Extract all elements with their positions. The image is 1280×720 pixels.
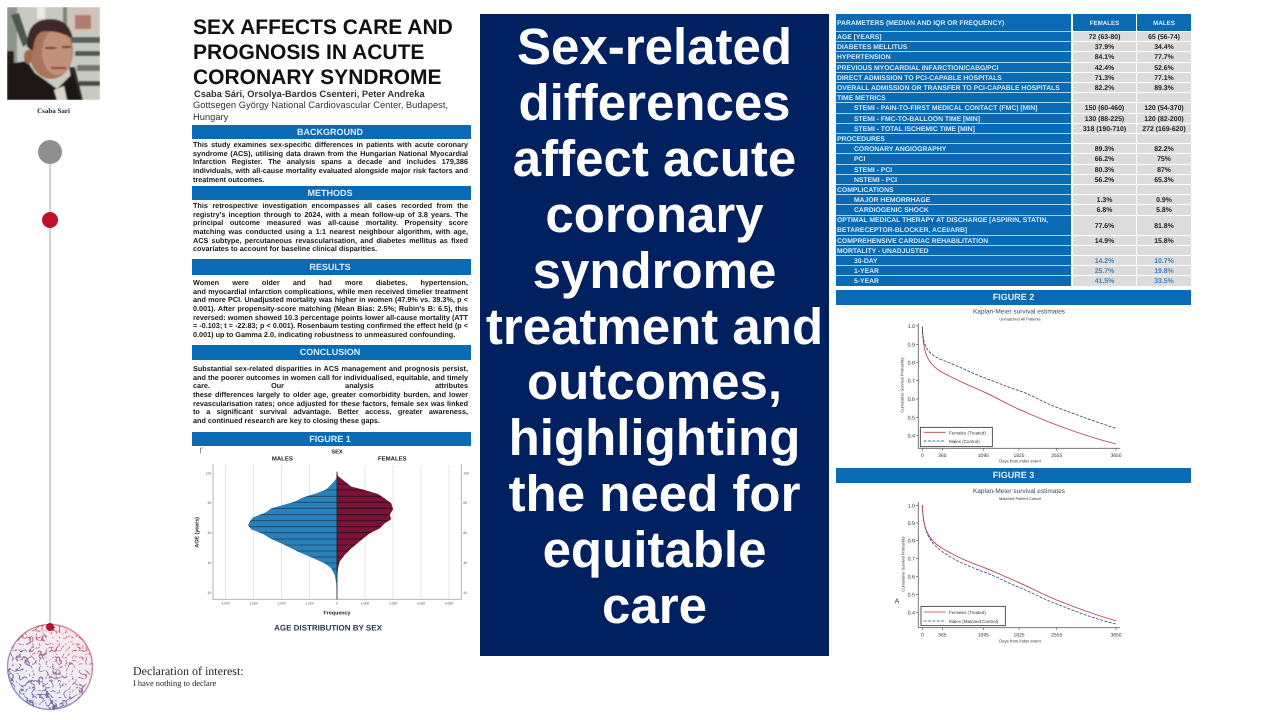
- legend matched: Females (Treated): [949, 610, 986, 615]
- heading: conclusion: CONCLUSION: [300, 347, 360, 357]
- text: results: reversed: women showed 10.3 percentage points lower all-cause mortality (ATT: [193, 313, 468, 322]
- text: conclusion: to a significant survival advantage. Better access, greater awareness,: [193, 407, 468, 416]
- row: overall admission: OVERALL ADMISSION OR TRANSFER TO PCI-CAPABLE HOSPITALS: [837, 85, 1060, 92]
- chart: age distribution by sex: 100: [206, 472, 211, 475]
- heading: figure 1: FIGURE 1: [309, 434, 351, 444]
- row: cardiac rehabilitation: 14.9%: [1095, 238, 1114, 245]
- text: background: treatment outcomes.: [193, 175, 264, 184]
- chart: age distribution by sex: MALES: [272, 455, 293, 462]
- chart: Kaplan-Meier unmatched: Days from index event: [999, 459, 1041, 464]
- text: results: = -0.103; t = -22.83; p < 0.001). Rosenbaum testing confirmed the effect held (p <: [193, 321, 468, 330]
- curve: males: [922, 327, 1116, 428]
- chart: Kaplan-Meier unmatched: 1825: [1013, 453, 1025, 458]
- row: hypertension: 77.7%: [1154, 54, 1174, 61]
- row: cardiac rehabilitation: 15.8%: [1154, 238, 1174, 245]
- text: background: Infarction Register. The analysis spans a decade and includes 179,386: [193, 157, 468, 166]
- text: results: and myocardial infarction complications, while men received timelier treatment: [193, 287, 468, 296]
- central message panel: Sex-related: [517, 18, 792, 75]
- row: major hemorrhage: MAJOR HEMORRHAGE: [854, 197, 930, 204]
- affiliation: Gottsegen György National Cardiovascular Center, Budapest,: [193, 100, 448, 110]
- row: overall admission: [836, 83, 1191, 92]
- title: CORONARY SYNDROME: [193, 66, 442, 89]
- text: conclusion: and continued research are key to closing these gaps.: [193, 416, 380, 425]
- chart: Kaplan-Meier matched: Matched Patient Cohort: [999, 496, 1041, 501]
- chart: age distribution by sex: 1,000: [305, 602, 314, 606]
- row: PCI: [836, 154, 1191, 164]
- presenter name: Csaba Sari: [37, 107, 70, 115]
- row: FMC to balloon: 130 (88-225): [1085, 116, 1124, 123]
- row: PCI: PCI: [854, 156, 865, 163]
- row: overall admission: 89.3%: [1154, 85, 1174, 92]
- row: 5-year mortality: 5-YEAR: [854, 278, 879, 285]
- table: patient characteristics: [836, 14, 1191, 286]
- row: major hemorrhage: 0.9%: [1156, 197, 1172, 204]
- chart: Kaplan-Meier matched: 0.9: [908, 521, 915, 526]
- chart: age distribution by sex: 60: [463, 531, 467, 535]
- title: [193, 16, 453, 89]
- chart: Kaplan-Meier matched: 0.8: [908, 538, 915, 544]
- chart: Kaplan-Meier matched: 0: [921, 632, 924, 638]
- chart: age distribution by sex: 3,000: [417, 602, 425, 606]
- chart: Kaplan-Meier unmatched: 0.5: [908, 415, 915, 421]
- chart: age distribution by sex: 80: [463, 501, 467, 505]
- row: NSTEMI PCI: 56.2%: [1095, 177, 1114, 184]
- chart: Kaplan-Meier matched: 0.4: [908, 610, 915, 616]
- row: 30-day mortality: [836, 256, 1191, 265]
- central message panel: affect acute: [513, 130, 796, 187]
- text: conclusion: Substantial sex-related disparities in ACS management and prognosis persist,: [193, 364, 468, 373]
- male bars: [245, 470, 337, 598]
- row: procedures section: [836, 134, 1191, 143]
- row: diabetes: [836, 42, 1191, 51]
- chart: Kaplan-Meier unmatched: Kaplan-Meier survival estimates: [973, 308, 1065, 315]
- legend matched: Males (Matched Control): [949, 619, 998, 624]
- row: STEMI PCI: STEMI - PCI: [854, 167, 892, 174]
- row: cardiac rehabilitation: COMPREHENSIVE CARDIAC REHABILITATION: [837, 238, 988, 245]
- text: results: and more PCI. Unadjusted mortality was higher in women (47.9% vs. 39.3%, p <: [193, 295, 468, 304]
- row: NSTEMI PCI: 65.3%: [1154, 177, 1174, 184]
- row: coronary angiography: 89.3%: [1095, 146, 1114, 153]
- row: complications section: [836, 185, 1191, 194]
- chart: Kaplan-Meier unmatched: 0.8: [908, 360, 915, 366]
- declaration of interest: I have nothing to declare: [133, 679, 216, 688]
- row: 5-year mortality: [836, 276, 1191, 286]
- row: 30-day mortality: 10.7%: [1154, 258, 1174, 265]
- row: direct admission: DIRECT ADMISSION TO PCI-CAPABLE HOSPITALS: [837, 75, 1002, 82]
- chart: Kaplan-Meier matched: 1825: [1013, 632, 1025, 638]
- row: procedures section: PROCEDURES: [837, 136, 885, 143]
- text: methods: matching was conducted using a 1:1 nearest neighbour algorithm, with age,: [193, 227, 468, 236]
- curve: males matched: [922, 505, 1116, 624]
- row: previous MI: PREVIOUS MYOCARDIAL INFARCTION/CABG/PCI: [837, 65, 998, 72]
- row: time metrics section: TIME METRICS: [837, 95, 886, 102]
- chart: Kaplan-Meier unmatched: 0.6: [908, 397, 915, 402]
- row: pain to FMC: [836, 103, 1191, 113]
- central message panel: equitable: [543, 521, 766, 578]
- chart: Kaplan-Meier unmatched: Unmatched All Patients: [999, 317, 1041, 322]
- row: cardiogenic shock: [836, 205, 1191, 215]
- chart: Kaplan-Meier matched: 1095: [978, 632, 989, 638]
- chart: Kaplan-Meier matched: 0.7: [908, 556, 915, 562]
- row: 1-year mortality: 19.8%: [1154, 268, 1174, 275]
- row: 5-year mortality: 41.5%: [1095, 278, 1114, 285]
- row: coronary angiography: [836, 144, 1191, 153]
- row: cardiogenic shock: CARDIOGENIC SHOCK: [854, 207, 929, 214]
- row: diabetes: 37.9%: [1095, 44, 1114, 51]
- row: age: [836, 32, 1191, 41]
- chart: Kaplan-Meier unmatched: 2555: [1051, 453, 1062, 458]
- text: results: 0.001). After propensity-score matching (Mean Bias: 2.5%; Rubin's B: 6.5), this: [193, 304, 468, 313]
- central message panel: outcomes,: [527, 353, 782, 410]
- row: major hemorrhage: 1.3%: [1097, 197, 1112, 204]
- row: direct admission: 71.3%: [1095, 75, 1114, 82]
- row: hypertension: 84.1%: [1095, 54, 1114, 61]
- chart: Kaplan-Meier unmatched: 0.9: [908, 342, 915, 348]
- chart: Kaplan-Meier unmatched: 0.7: [908, 378, 915, 384]
- chart: age distribution by sex: AGE DISTRIBUTION BY SEX: [274, 623, 382, 632]
- icon: vascular globe: [6, 623, 94, 710]
- row: previous MI: 42.4%: [1095, 65, 1114, 72]
- timeline connector: [49, 160, 51, 628]
- text: results: Women were older and had more diabetes, hypertension,: [193, 278, 468, 287]
- row: age: 72 (63-80): [1089, 34, 1120, 41]
- chart: age distribution by sex: 4,000: [221, 602, 230, 606]
- chart: age distribution by sex: 2,000: [277, 602, 286, 606]
- central message panel: treatment and: [486, 298, 823, 355]
- declaration of interest: [133, 664, 244, 688]
- chart: age distribution by sex: SEX: [331, 448, 343, 455]
- row: FMC to balloon: STEMI - FMC-TO-BALLOON TIME [MIN]: [854, 116, 980, 123]
- row: optimal medical therapy: [836, 216, 1191, 235]
- chart: Kaplan-Meier matched: Kaplan-Meier survival estimates: [973, 487, 1065, 495]
- row: mortality section: MORTALITY - UNADJUSTED: [837, 248, 929, 255]
- chart: Kaplan-Meier matched: 0.5: [908, 592, 915, 598]
- row: NSTEMI PCI: [836, 175, 1191, 184]
- row: NSTEMI PCI: NSTEMI - PCI: [854, 177, 897, 184]
- chart: Kaplan-Meier unmatched: [900, 308, 1122, 464]
- row: FMC to balloon: 120 (82-200): [1144, 116, 1184, 123]
- row: direct admission: [836, 73, 1191, 82]
- timeline node: grey: [38, 140, 62, 164]
- table header: [836, 14, 1191, 31]
- row: time metrics section: [836, 93, 1191, 102]
- text: background: [193, 140, 468, 184]
- legend: Males (Control): [949, 439, 980, 444]
- chart: Kaplan-Meier unmatched: 1.0: [908, 324, 915, 329]
- text: conclusion: these differences largely to older age, greater comorbidity burden, and lower: [193, 390, 468, 399]
- row: ischemic time: [836, 124, 1191, 133]
- chart: age distribution by sex: 1,000: [361, 602, 369, 606]
- row: optimal medical therapy: OPTIMAL MEDICAL THERAPY AT DISCHARGE [ASPIRIN, STATIN,: [837, 217, 1048, 224]
- legend: Females (Treated): [949, 430, 986, 435]
- row: complications section: COMPLICATIONS: [837, 187, 894, 194]
- chart: Kaplan-Meier unmatched: 0: [921, 453, 924, 458]
- chart: age distribution by sex: 80: [208, 501, 211, 505]
- chart: Kaplan-Meier matched: Days from index event: [999, 639, 1041, 643]
- authors: Csaba Sári, Orsolya-Bardos Csenteri, Peter Andreka: [194, 89, 425, 99]
- text: methods: [193, 201, 468, 253]
- row: ischemic time: STEMI - TOTAL ISCHEMIC TIME [MIN]: [854, 126, 975, 133]
- affiliation: Hungary: [193, 112, 228, 122]
- central message panel: differences: [518, 74, 791, 131]
- text: results: 0.001) up to Gamma 2.0, indicating robustness to unmeasured confounding.: [193, 330, 455, 339]
- curve: females matched: [922, 505, 1116, 621]
- row: optimal medical therapy: 77.6%: [1095, 223, 1114, 230]
- chart: age distribution by sex: 4,000: [445, 602, 453, 606]
- heading: figure 3: FIGURE 3: [993, 470, 1034, 480]
- row: diabetes: DIABETES MELLITUS: [837, 44, 907, 51]
- text: conclusion: [193, 364, 468, 425]
- central message panel: the need for: [509, 465, 800, 522]
- heading: figure 1: [192, 432, 468, 446]
- chart: age distribution by sex: 40: [463, 561, 467, 565]
- table header: FEMALES: [1090, 20, 1119, 27]
- chart: age distribution by sex: Frequency: [324, 610, 351, 616]
- row: ischemic time: 318 (190-710): [1083, 126, 1126, 133]
- row: STEMI PCI: 80.3%: [1095, 167, 1114, 174]
- chart: age distribution by sex: FEMALES: [378, 455, 407, 462]
- text: conclusion: revascularisation rates; once adjusted for these factors, female sex was linked: [193, 399, 468, 408]
- row: 30-day mortality: 14.2%: [1095, 258, 1114, 265]
- affiliation: [193, 100, 448, 122]
- row: previous MI: [836, 63, 1191, 72]
- heading: figure 2: [836, 290, 1191, 304]
- chart: age distribution by sex: 20: [208, 591, 211, 595]
- row: hypertension: [836, 52, 1191, 62]
- text: results: [193, 278, 468, 339]
- row: 1-year mortality: 25.7%: [1095, 268, 1114, 275]
- chart: Kaplan-Meier matched: [894, 487, 1122, 644]
- row: mortality section: [836, 246, 1191, 255]
- heading: figure 3: [836, 468, 1191, 483]
- heading: results: [192, 259, 468, 275]
- heading: background: BACKGROUND: [297, 127, 363, 137]
- row: coronary angiography: 82.2%: [1154, 146, 1174, 153]
- central message panel: care: [602, 577, 707, 634]
- text: methods: principal outcome measured was all-cause mortality. Propensity score: [193, 218, 468, 227]
- row: cardiogenic shock: 5.8%: [1156, 207, 1172, 214]
- chart: Kaplan-Meier matched: 1.0: [908, 503, 915, 509]
- row: optimal medical therapy: BETARECEPTOR-BLOCKER, ACEI/ARB]: [837, 227, 967, 234]
- central message panel: syndrome: [533, 242, 776, 299]
- row: 30-day mortality: 30-DAY: [854, 258, 878, 265]
- row: 1-year mortality: 1-YEAR: [854, 268, 879, 275]
- row: 1-year mortality: [836, 266, 1191, 275]
- chart: Kaplan-Meier unmatched: 365: [938, 453, 947, 458]
- row: pain to FMC: 120 (54-370): [1144, 105, 1184, 112]
- row: coronary angiography: CORONARY ANGIOGRAPHY: [854, 146, 946, 153]
- row: direct admission: 77.1%: [1154, 75, 1174, 82]
- chart: age distribution by sex: 60: [208, 531, 211, 535]
- text: methods: ACS subtype, percutaneous revascularisation, and diabetes mellitus as fixed: [193, 236, 468, 245]
- chart: Kaplan-Meier matched: 0.6: [908, 574, 915, 580]
- chart: Kaplan-Meier unmatched: 1095: [978, 453, 989, 458]
- chart: age distribution by sex: 3,000: [249, 602, 258, 606]
- row: cardiac rehabilitation: [836, 236, 1191, 245]
- chart: age distribution by sex: [194, 448, 469, 632]
- row: STEMI PCI: [836, 165, 1191, 174]
- heading: conclusion: [192, 345, 468, 360]
- central message panel: [480, 14, 829, 656]
- title: SEX AFFECTS CARE AND: [193, 16, 453, 39]
- chart: Kaplan-Meier unmatched: 3650: [1110, 453, 1122, 458]
- row: PCI: 75%: [1157, 156, 1171, 163]
- curve: females: [922, 327, 1116, 444]
- row: pain to FMC: 150 (60-460): [1085, 105, 1124, 112]
- row: FMC to balloon: [836, 114, 1191, 123]
- row: 5-year mortality: 33.5%: [1154, 278, 1174, 285]
- title: PROGNOSIS IN ACUTE: [193, 41, 424, 64]
- central message panel: highlighting: [509, 409, 800, 466]
- heading: methods: METHODS: [308, 188, 352, 198]
- chart: Kaplan-Meier unmatched: Cumulative Survival Probability: [900, 357, 904, 413]
- row: cardiogenic shock: 6.8%: [1097, 207, 1112, 214]
- chart: age distribution by sex: 0: [336, 602, 338, 606]
- chart: Kaplan-Meier matched: Cumulative Survival Probability: [901, 536, 905, 592]
- row: PCI: 66.2%: [1095, 156, 1114, 163]
- presenter photo: [7, 7, 100, 100]
- table header: MALES: [1153, 20, 1175, 27]
- table header: PARAMETERS (MEDIAN AND IQR OR FREQUENCY): [837, 20, 1004, 27]
- declaration of interest: Declaration of interest:: [133, 664, 244, 678]
- chart: age distribution by sex: 20: [463, 591, 467, 595]
- text: conclusion: and the poorer outcomes in women call for individualised, equitable, and timely: [193, 373, 468, 382]
- chart: age distribution by sex: 100: [463, 472, 469, 475]
- timeline node: red: [42, 212, 58, 228]
- text: background: individuals, with all-cause mortality evaluated alongside major risk factors and: [193, 166, 468, 175]
- text: methods: This retrospective investigation encompasses all cases recorded from the: [193, 201, 468, 210]
- chart: Kaplan-Meier unmatched: 0.4: [908, 433, 915, 439]
- row: diabetes: 34.4%: [1154, 44, 1174, 51]
- row: STEMI PCI: 87%: [1157, 167, 1171, 174]
- text: background: This study examines sex-specific differences in patients with acute coronary: [193, 140, 468, 149]
- text: conclusion: care. Our analysis attributes: [193, 381, 468, 390]
- row: overall admission: 82.2%: [1095, 85, 1114, 92]
- chart: Kaplan-Meier matched: 3650: [1110, 632, 1122, 638]
- heading: methods: [192, 186, 468, 200]
- chart: age distribution by sex: 2,000: [389, 602, 397, 606]
- row: age: 65 (56-74): [1148, 34, 1180, 41]
- chart: Kaplan-Meier matched: 2555: [1051, 632, 1062, 638]
- legend matched: [921, 606, 1005, 626]
- row: age: AGE [YEARS]: [837, 34, 882, 41]
- row: ischemic time: 272 (169-620): [1142, 126, 1186, 133]
- text: background: syndrome (ACS), utilising data drawn from the Hungarian National Myocardial: [193, 149, 468, 158]
- central message panel: coronary: [545, 186, 764, 243]
- text: methods: registry's inception through to 2024, with a mean follow-up of 3.8 years. The: [193, 210, 468, 219]
- heading: results: RESULTS: [309, 262, 351, 272]
- heading: background: [192, 125, 468, 139]
- chart: Kaplan-Meier matched: 365: [938, 632, 947, 638]
- chart: age distribution by sex: 40: [208, 561, 211, 565]
- text: methods: covariates to account for baseline clinical disparities.: [193, 244, 377, 253]
- legend: [920, 427, 992, 447]
- row: optimal medical therapy: 81.8%: [1154, 223, 1174, 230]
- row: hypertension: HYPERTENSION: [837, 54, 891, 61]
- heading: figure 2: FIGURE 2: [993, 292, 1034, 302]
- row: major hemorrhage: [836, 195, 1191, 204]
- chart: Kaplan-Meier matched: A: [895, 597, 900, 605]
- female bars: [337, 472, 393, 578]
- chart: age distribution by sex: AGE (years): [194, 517, 200, 548]
- row: previous MI: 52.6%: [1154, 65, 1174, 72]
- row: pain to FMC: STEMI - PAIN-TO-FIRST MEDICAL CONTACT (FMC) [MIN]: [854, 105, 1037, 112]
